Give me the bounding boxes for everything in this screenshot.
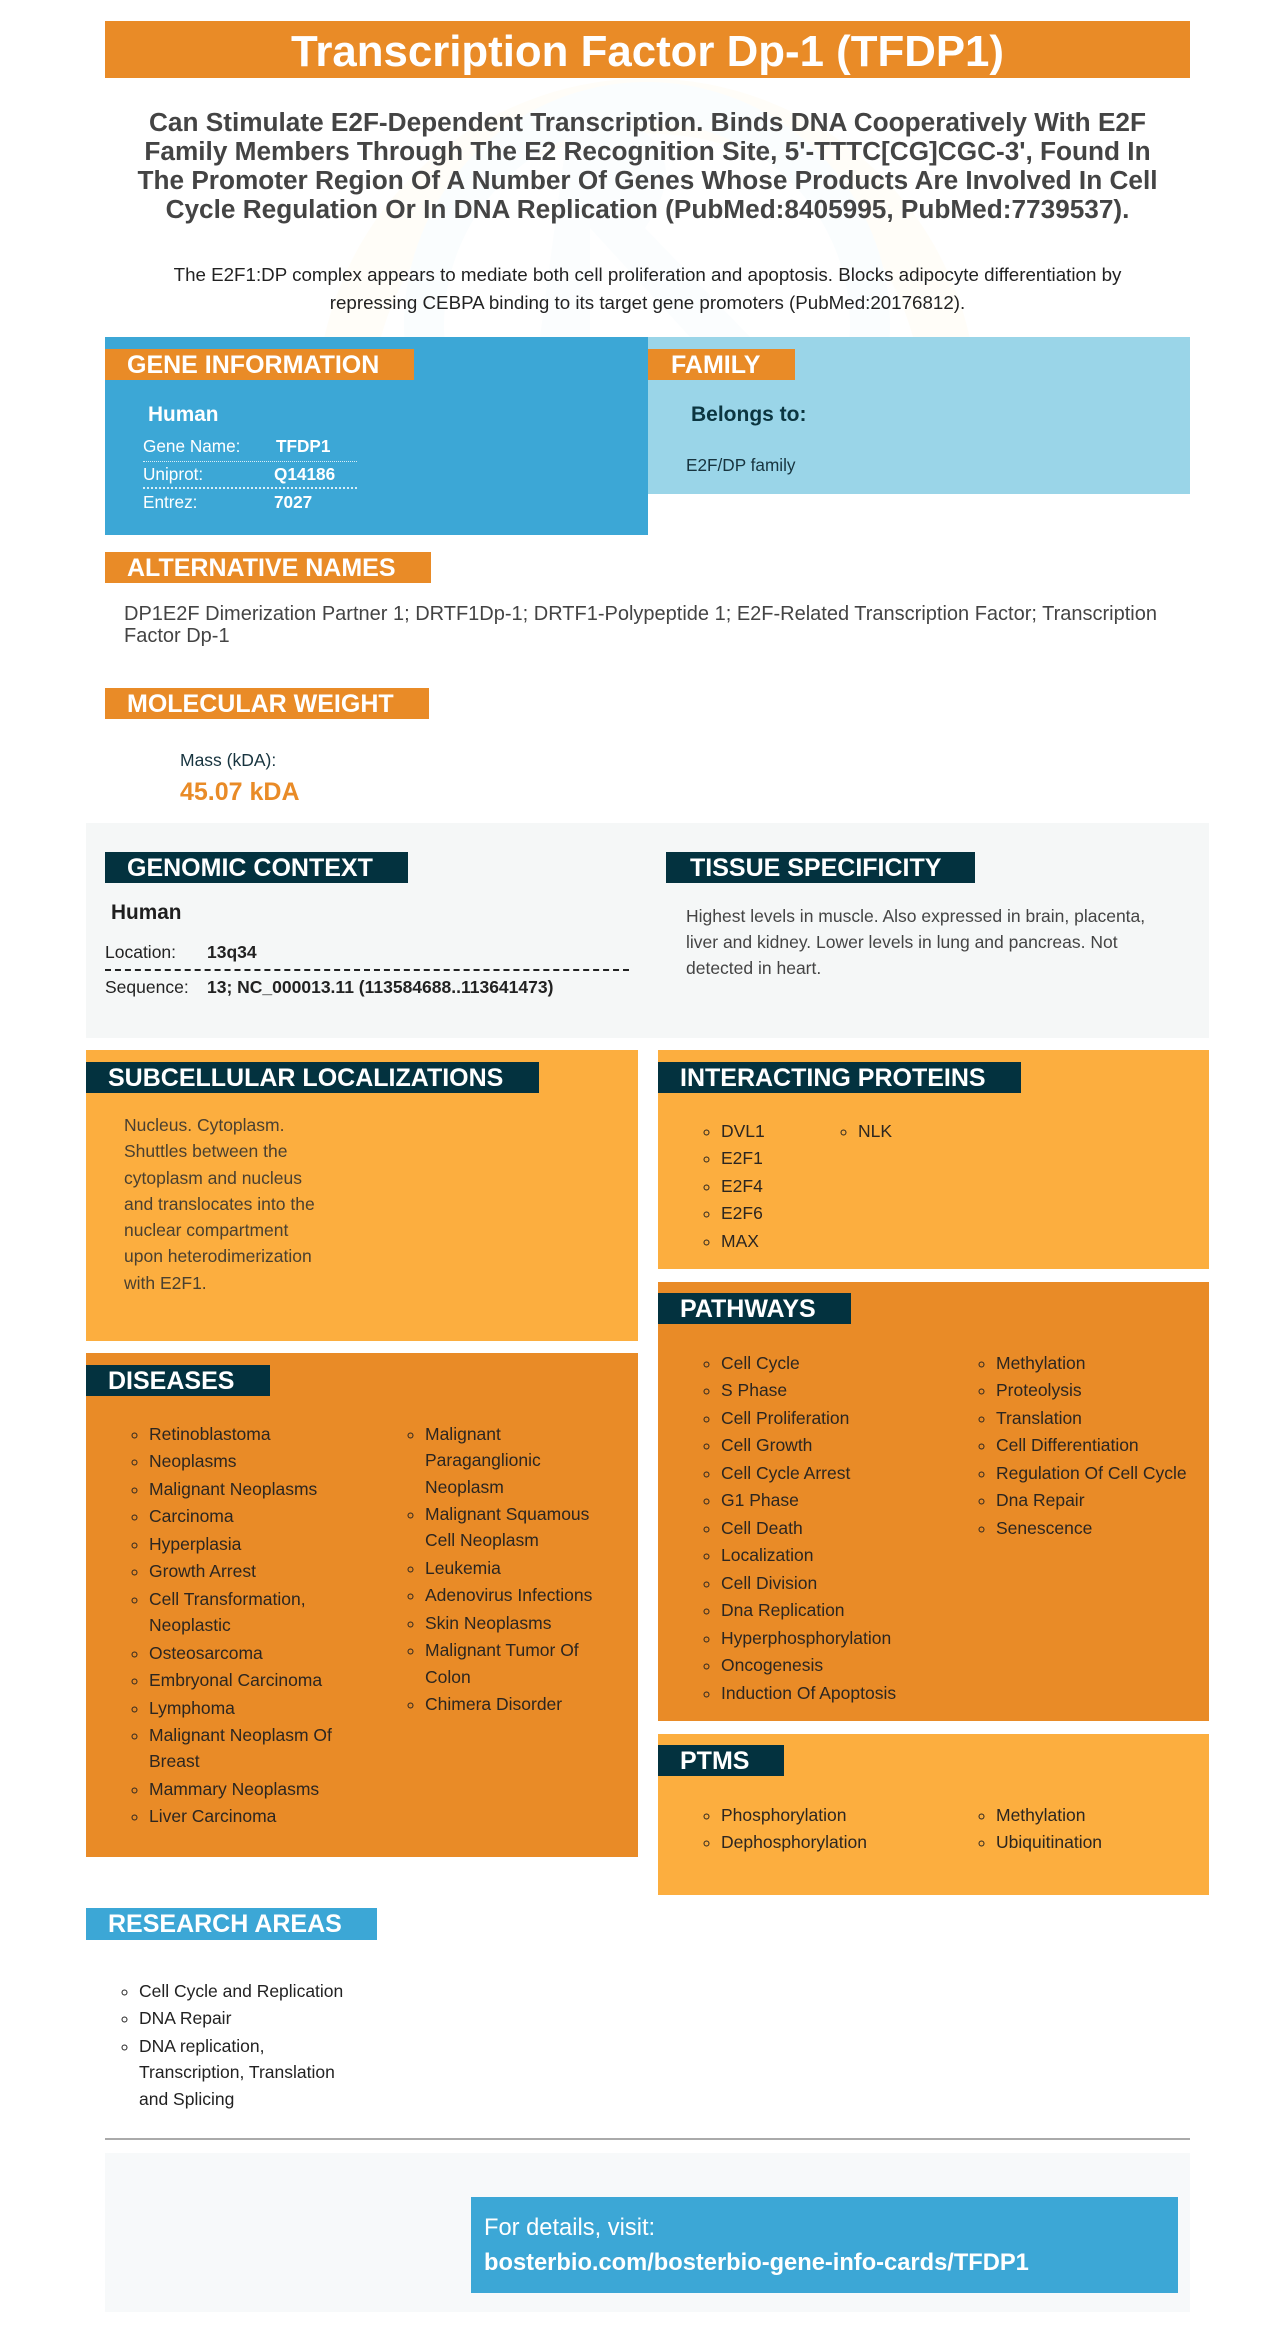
diseases list column 2: Leukemia [425, 1558, 501, 1578]
diseases list column 1: Cell Transformation, Neoplastic [149, 1589, 306, 1635]
subtitle summary [137, 107, 1158, 224]
mass label: Mass (kDA): [180, 750, 276, 770]
family value: E2F/DP family [686, 455, 796, 475]
localization text: nuclear compartment [124, 1220, 288, 1240]
diseases list column 2: Malignant Squamous Cell Neoplasm [425, 1504, 589, 1550]
protein list column 2: NLK [858, 1121, 892, 1141]
pathways list column 1: G1 Phase [721, 1490, 799, 1510]
research areas list: Cell Cycle and Replication [139, 1981, 343, 2001]
subtitle summary: Cycle Regulation Or In DNA Replication (PubMed:8405995, PubMed:7739537). [166, 194, 1129, 224]
protein list column 1: E2F6 [721, 1203, 763, 1223]
diseases list column 2 [408, 1424, 592, 1714]
heading: tissue specificity: TISSUE SPECIFICITY [690, 854, 941, 882]
sequence row: 13; NC_000013.11 (113584688..113641473) [207, 977, 553, 997]
heading: diseases: DISEASES [108, 1367, 234, 1395]
protein list column 1: E2F4 [721, 1176, 763, 1196]
tissue specificity text: liver and kidney. Lower levels in lung and pancreas. Not [686, 932, 1118, 952]
watermark logo [300, 78, 1000, 337]
title bar: Transcription Factor Dp-1 (TFDP1) [291, 27, 1004, 76]
diseases list column 2: Chimera Disorder [425, 1694, 562, 1714]
heading: genomic context: GENOMIC CONTEXT [127, 854, 373, 882]
description text: repressing CEBPA binding to its target gene promoters (PubMed:20176812). [330, 292, 965, 313]
callout label: For details, visit: [484, 2215, 655, 2241]
pathways list column 2: Dna Repair [996, 1490, 1085, 1510]
pathways list column 1: Oncogenesis [721, 1655, 823, 1675]
subtitle summary: Family Members Through The E2 Recognition Site, 5'-TTTC[CG]CGC-3', Found In [144, 136, 1151, 166]
pathways list column 2 [978, 1353, 1187, 1538]
pathways list column 1: Cell Death [721, 1518, 803, 1538]
panel: pathways [658, 1282, 1209, 1721]
uniprot row [143, 461, 357, 489]
localization text: Shuttles between the [124, 1141, 287, 1161]
entrez row [143, 492, 312, 512]
diseases list column 1: Embryonal Carcinoma [149, 1670, 322, 1690]
location row [105, 939, 629, 971]
callout: details link [471, 2197, 1178, 2293]
callout url: bosterbio.com/bosterbio-gene-info-cards/TFDP1 [484, 2250, 1029, 2276]
diseases list column 1: Malignant Neoplasm Of Breast [149, 1725, 332, 1771]
heading: ptms: PTMS [680, 1747, 749, 1775]
panel: genomic context and tissue specificity [86, 823, 1209, 1038]
uniprot row: Q14186 [274, 464, 335, 484]
tissue specificity text: detected in heart. [686, 958, 821, 978]
sequence row: Sequence: [105, 977, 189, 997]
entrez row: Entrez: [143, 492, 197, 512]
panel: gene information [105, 337, 648, 535]
tissue specificity text [686, 906, 1145, 978]
ptms list column 2: Ubiquitination [996, 1832, 1102, 1852]
research areas list [122, 1981, 343, 2109]
pathways list column 1: Cell Division [721, 1573, 817, 1593]
heading: subcellular localizations: SUBCELLULAR LOCALIZATIONS [108, 1064, 503, 1092]
title bar [105, 21, 1190, 78]
protein list column 1: E2F1 [721, 1148, 763, 1168]
location row: Location: [105, 942, 176, 962]
tissue specificity text: Highest levels in muscle. Also expressed in brain, placenta, [686, 906, 1145, 926]
heading: pathways: PATHWAYS [680, 1295, 816, 1323]
diseases list column 1: Neoplasms [149, 1451, 237, 1471]
pathways list column 2: Proteolysis [996, 1380, 1082, 1400]
pathways list column 1: Cell Growth [721, 1435, 812, 1455]
heading: alternative names: ALTERNATIVE NAMES [127, 554, 396, 582]
heading: diseases [86, 1365, 270, 1396]
pathways list column 1: Localization [721, 1545, 813, 1565]
localization text: upon heterodimerization [124, 1246, 312, 1266]
diseases list column 1 [132, 1424, 332, 1826]
alternative names text: DP1E2F Dimerization Partner 1; DRTF1Dp-1; DRTF1-Polypeptide 1; E2F-Related Transcription Factor; Transcription [124, 603, 1157, 625]
heading: ptms [658, 1745, 784, 1776]
heading: family: FAMILY [671, 351, 760, 379]
localization text: with E2F1. [124, 1273, 207, 1293]
ptms list column 2: Methylation [996, 1805, 1086, 1825]
diseases list column 1: Liver Carcinoma [149, 1806, 276, 1826]
protein list column 1: DVL1 [721, 1121, 765, 1141]
panel: ptms [658, 1734, 1209, 1895]
diseases list column 1: Malignant Neoplasms [149, 1479, 317, 1499]
heading: pathways [658, 1293, 851, 1324]
subtitle summary: Can Stimulate E2F-Dependent Transcription. Binds DNA Cooperatively With E2F [149, 107, 1146, 137]
subtitle summary: The Promoter Region Of A Number Of Genes Whose Products Are Involved In Cell [137, 165, 1158, 195]
pathways list column 1: Induction Of Apoptosis [721, 1683, 896, 1703]
pathways list column 2: Cell Differentiation [996, 1435, 1139, 1455]
diseases list column 1: Mammary Neoplasms [149, 1779, 319, 1799]
localization text [124, 1115, 315, 1293]
species label: Human [148, 403, 218, 426]
diseases list column 1: Carcinoma [149, 1506, 234, 1526]
research areas list: DNA replication, Transcription, Translation and Splicing [139, 2036, 335, 2109]
heading: research areas: RESEARCH AREAS [108, 1910, 342, 1938]
pathways list column 2: Senescence [996, 1518, 1092, 1538]
pathways list column 1: Dna Replication [721, 1600, 845, 1620]
panel: family [648, 337, 1190, 494]
species label: Human [111, 901, 181, 924]
diseases list column 2: Skin Neoplasms [425, 1613, 551, 1633]
panel: interacting proteins [658, 1050, 1209, 1269]
localization text: and translocates into the [124, 1194, 315, 1214]
entrez row: 7027 [274, 492, 312, 512]
localization text: cytoplasm and nucleus [124, 1168, 302, 1188]
panel: diseases [86, 1353, 638, 1857]
panel: footer [105, 2153, 1190, 2312]
gene name row: TFDP1 [276, 436, 330, 456]
pathways list column 1: Cell Cycle Arrest [721, 1463, 850, 1483]
belongs to label: Belongs to: [691, 403, 806, 426]
panel: subcellular localizations [86, 1050, 638, 1341]
gene name row: Gene Name: [143, 436, 240, 456]
heading: gene information: GENE INFORMATION [127, 351, 379, 379]
diseases list column 1: Hyperplasia [149, 1534, 241, 1554]
diseases list column 2: Malignant Paraganglionic Neoplasm [425, 1424, 541, 1497]
diseases list column 1: Lymphoma [149, 1698, 235, 1718]
alternative names text [124, 603, 1157, 647]
heading: interacting proteins: INTERACTING PROTEINS [680, 1064, 986, 1092]
pathways list column 2: Methylation [996, 1353, 1086, 1373]
pathways list column 2: Translation [996, 1408, 1082, 1428]
pathways list column 1: Cell Proliferation [721, 1408, 849, 1428]
ptms list column 2 [978, 1805, 1102, 1852]
protein list column 1: MAX [721, 1231, 759, 1251]
gene name row [143, 433, 357, 462]
ptms list column 1: Dephosphorylation [721, 1832, 867, 1852]
description text [174, 264, 1122, 313]
pathways list column 1 [704, 1353, 896, 1703]
diseases list column 1: Osteosarcoma [149, 1643, 263, 1663]
ptms list column 1: Phosphorylation [721, 1805, 846, 1825]
localization text: Nucleus. Cytoplasm. [124, 1115, 284, 1135]
diseases list column 2: Adenovirus Infections [425, 1585, 592, 1605]
diseases list column 1: Retinoblastoma [149, 1424, 271, 1444]
uniprot row: Uniprot: [143, 464, 203, 484]
protein list column 1 [704, 1121, 765, 1251]
ptms list column 1 [704, 1805, 867, 1852]
diseases list column 2: Malignant Tumor Of Colon [425, 1640, 579, 1687]
heading: family [648, 349, 795, 380]
description text: The E2F1:DP complex appears to mediate both cell proliferation and apoptosis. Blocks adipocyte differentiation by [174, 264, 1121, 285]
pathways list column 1: Hyperphosphorylation [721, 1628, 891, 1648]
pathways list column 1: S Phase [721, 1380, 787, 1400]
alternative names text: Factor Dp-1 [124, 625, 230, 647]
heading: molecular weight: MOLECULAR WEIGHT [127, 690, 394, 718]
location row: 13q34 [207, 942, 257, 962]
pathways list column 1: Cell Cycle [721, 1353, 800, 1373]
diseases list column 1: Growth Arrest [149, 1561, 256, 1581]
mass value: 45.07 kDA [180, 778, 300, 806]
pathways list column 2: Regulation Of Cell Cycle [996, 1463, 1187, 1483]
research areas list: DNA Repair [139, 2008, 231, 2028]
